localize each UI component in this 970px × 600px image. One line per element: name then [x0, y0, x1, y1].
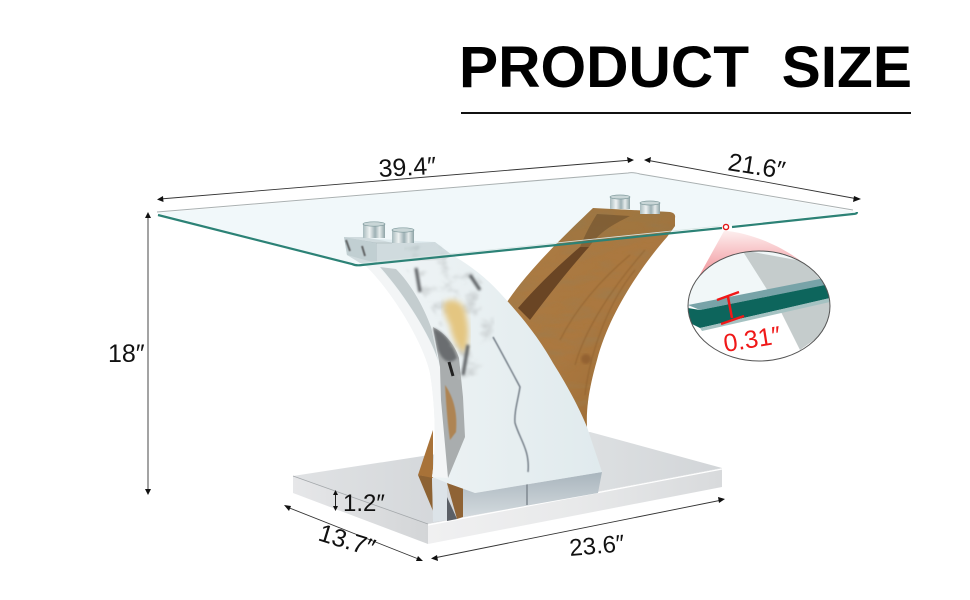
dimension: base depth 13.7 [284, 505, 423, 563]
magnifier callout [688, 224, 835, 361]
dimension: base thickness 1.2: 1.2″ [343, 490, 385, 517]
dimension: base depth 13.7: 13.7″ [315, 519, 379, 563]
base plate [293, 432, 722, 544]
marble mottling [400, 256, 495, 380]
dimension: base width 23.6 [431, 497, 725, 562]
base reflection [418, 472, 602, 522]
white marble arm [344, 237, 602, 493]
dimension: base width 23.6: 23.6″ [568, 530, 626, 562]
dimension: width 21.6 [644, 148, 861, 202]
thickness label: 0.31″ [722, 321, 783, 358]
left side stripe [367, 267, 448, 478]
gold vein [444, 300, 468, 353]
marble vein [493, 337, 528, 472]
marble block [344, 237, 452, 263]
dimension: height 18 [108, 212, 151, 495]
grey band [380, 267, 438, 360]
glass table top [157, 173, 857, 265]
marble dark strip [433, 327, 465, 478]
title: PRODUCT SIZE [459, 35, 912, 100]
wood arm [418, 208, 675, 488]
bolts [363, 195, 660, 243]
thickness marker [717, 292, 744, 324]
dimension: length 39.4: 39.4″ [378, 152, 437, 183]
dimension: width 21.6: 21.6″ [726, 148, 787, 185]
lens [688, 250, 835, 361]
lower wood strips [418, 430, 433, 478]
dimension: height 18: 18″ [108, 340, 145, 368]
dimension: length 39.4 [157, 152, 634, 202]
